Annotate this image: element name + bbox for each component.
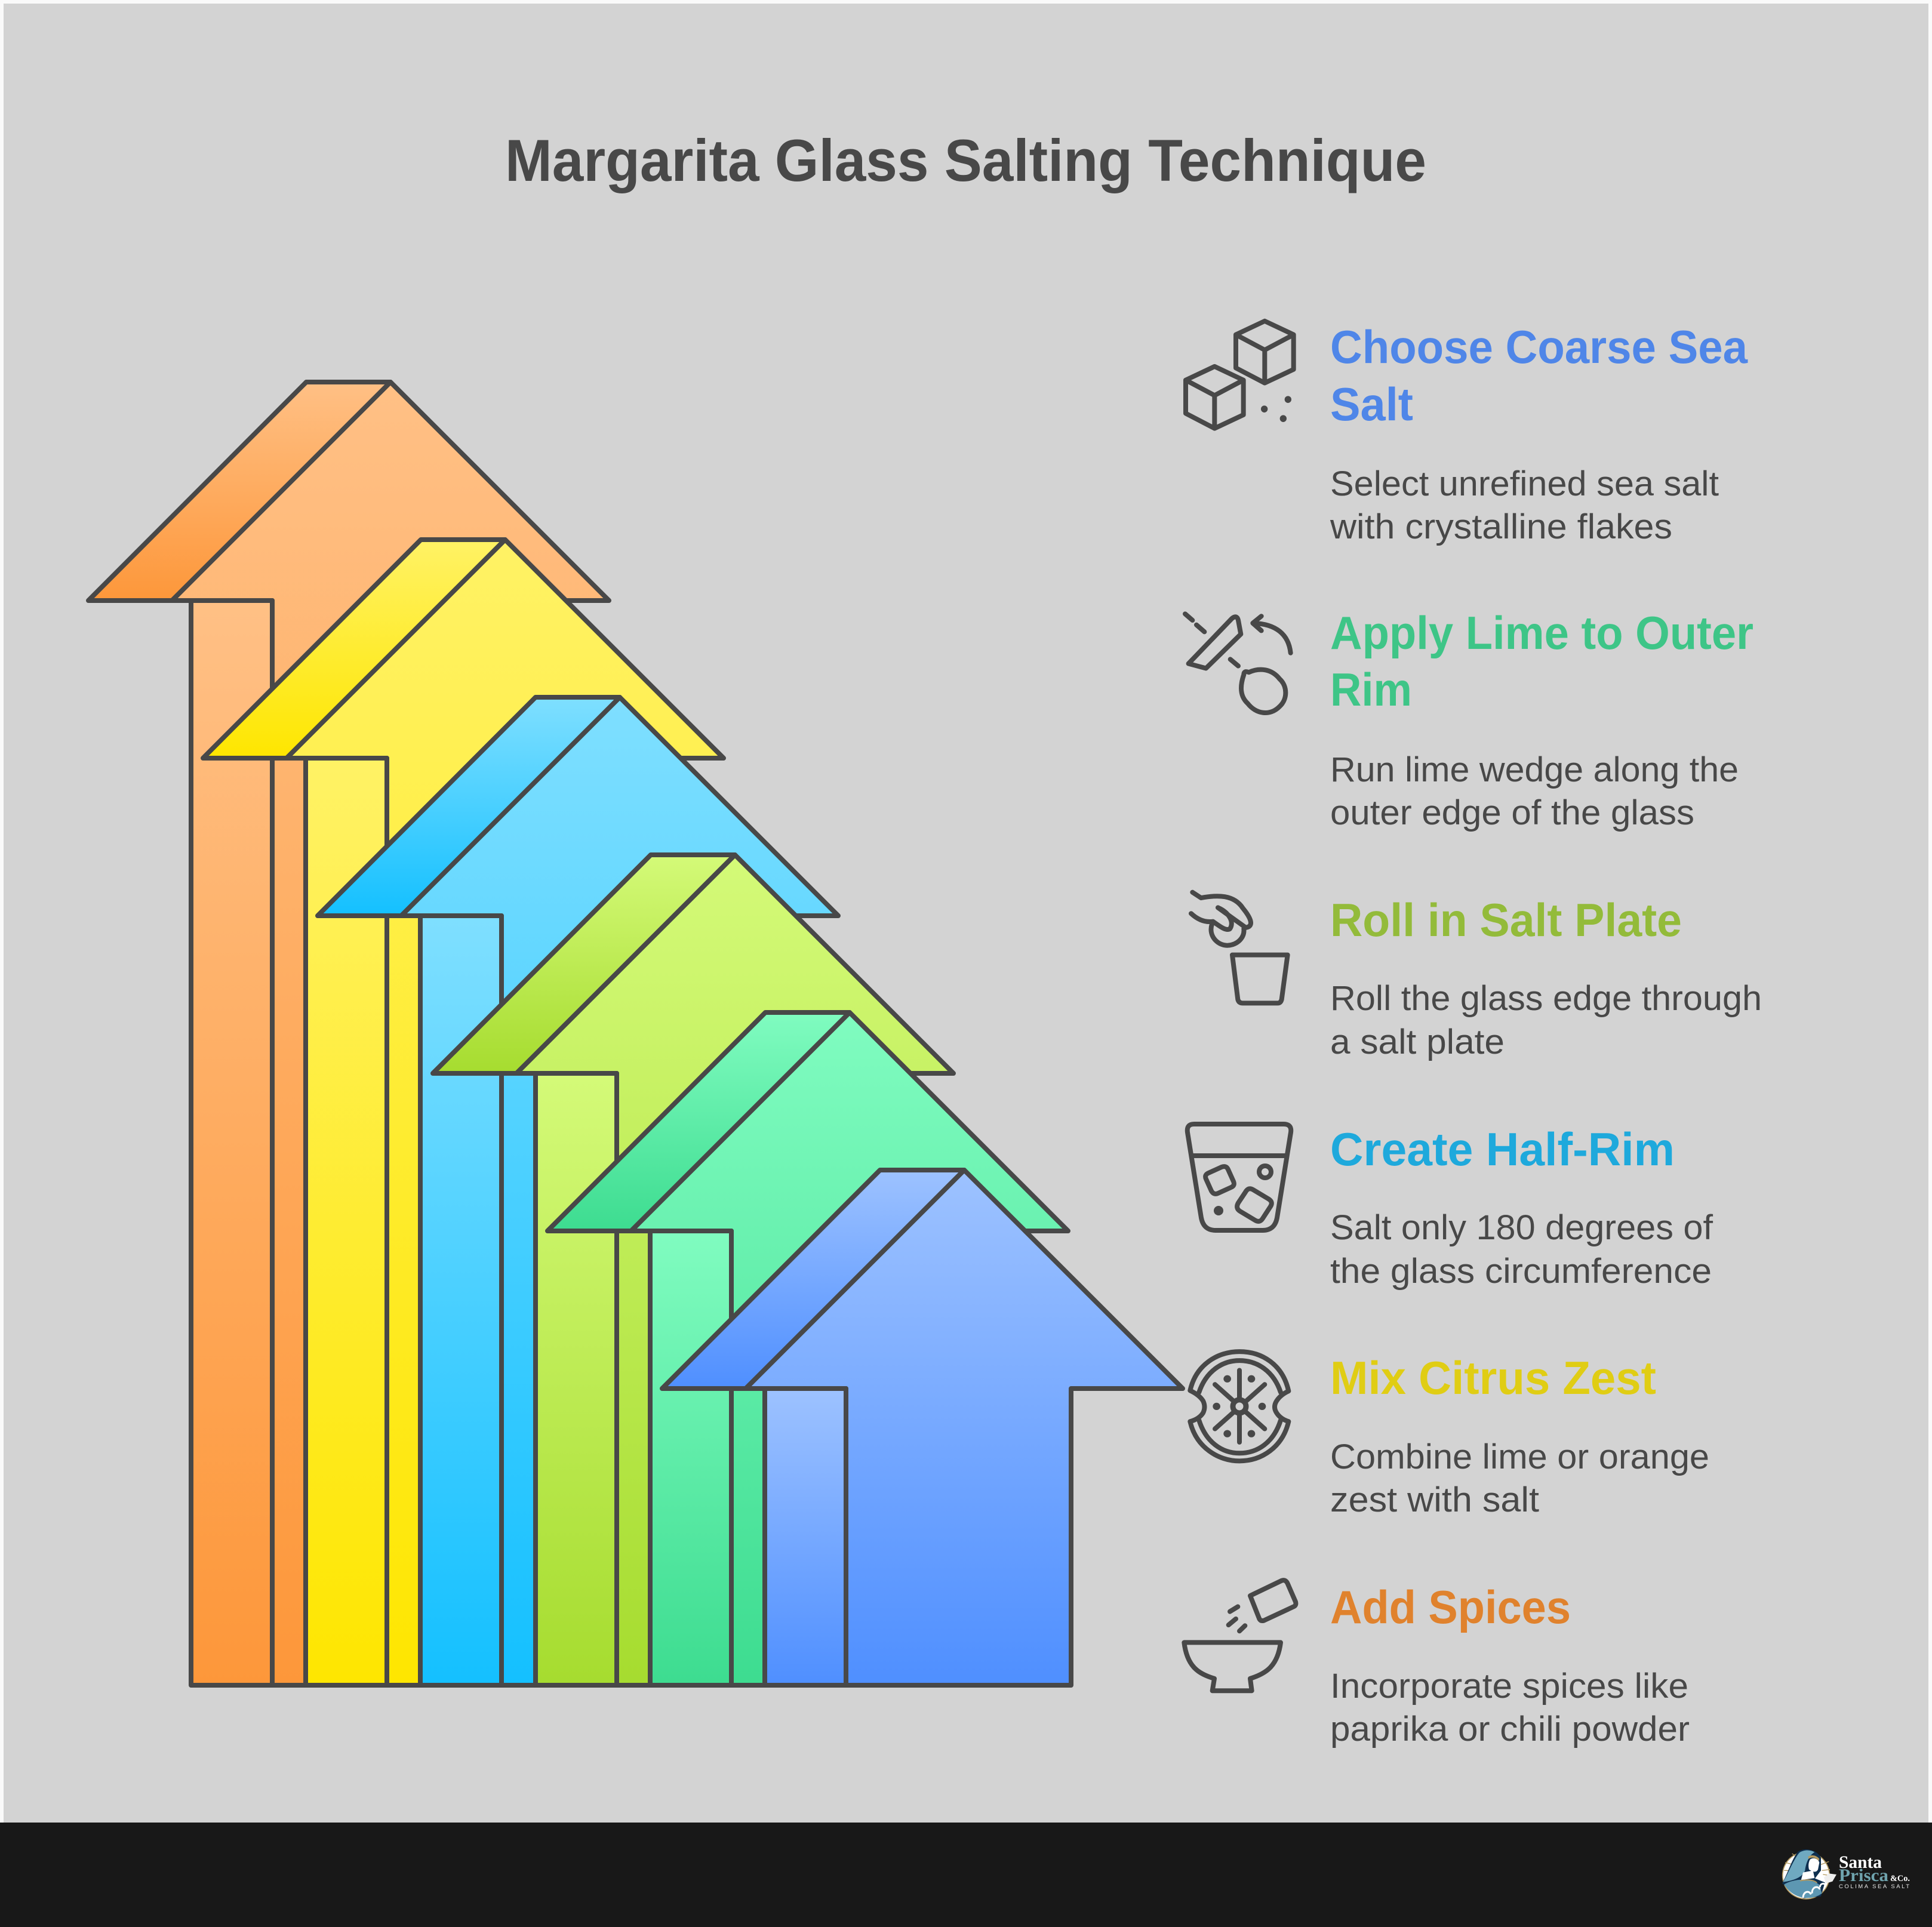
step 4 text: Salt only 180 degrees of (1330, 1208, 1713, 1247)
icon: citrus slice (1190, 1352, 1288, 1461)
step 2 text: Rim (1330, 663, 1412, 716)
step 1 text (1330, 321, 1748, 546)
arrow chart: six stacked arrows (88, 382, 1183, 1685)
logo wordmark (1839, 1852, 1910, 1890)
step 4 text: Create Half-Rim (1330, 1123, 1675, 1175)
logo wordmark: COLIMA SEA SALT (1839, 1883, 1909, 1890)
step 6 text: Add Spices (1330, 1581, 1571, 1633)
step 2 text: Run lime wedge along the (1330, 750, 1739, 789)
icon: spices into bowl (1184, 1580, 1296, 1691)
step 1 text: Select unrefined sea salt (1330, 464, 1719, 503)
logo wordmark: &Co. (1890, 1874, 1910, 1883)
icon: half-rimmed glass with ice (1187, 1124, 1291, 1230)
icon: hand rolling glass (1191, 892, 1288, 1003)
step 1 text: Salt (1330, 378, 1413, 430)
step 2 text (1330, 607, 1753, 832)
step 3 text: a salt plate (1330, 1023, 1505, 1061)
logo wordmark: Santa (1839, 1852, 1882, 1872)
arrow 4: lime (433, 855, 953, 1685)
arrow 1: orange (88, 382, 609, 1685)
title: Margarita Glass Salting Technique (505, 127, 1426, 193)
step 6 text: Incorporate spices like (1330, 1667, 1688, 1706)
step 2 text: outer edge of the glass (1330, 793, 1694, 832)
step 4 text: the glass circumference (1330, 1252, 1712, 1291)
logo emblem (1782, 1849, 1836, 1899)
step 1 text: Choose Coarse Sea (1330, 321, 1748, 373)
footer logo (1782, 1849, 1910, 1899)
step 3 text: Roll in Salt Plate (1330, 894, 1682, 946)
step 3 text (1330, 894, 1762, 1061)
step 6 text: paprika or chili powder (1330, 1710, 1690, 1749)
arrow 2: yellow (203, 540, 724, 1685)
logo wordmark: Prisca (1839, 1866, 1888, 1885)
footer bar (0, 1823, 1932, 1927)
step 5 text: Combine lime or orange (1330, 1437, 1709, 1476)
step 1 text: with crystalline flakes (1330, 507, 1672, 546)
step 5 text (1330, 1352, 1709, 1519)
icon: salt cubes (1186, 321, 1294, 429)
step 3 text: Roll the glass edge through (1330, 979, 1762, 1018)
step 6 text (1330, 1581, 1690, 1749)
arrow 3: sky blue (318, 697, 838, 1685)
step 4 text (1330, 1123, 1713, 1291)
step 5 text: zest with salt (1330, 1480, 1539, 1519)
arrow 6: blue (662, 1170, 1183, 1685)
step 2 text: Apply Lime to Outer (1330, 607, 1753, 659)
arrow 5: green (547, 1012, 1068, 1685)
step 5 text: Mix Citrus Zest (1330, 1352, 1656, 1404)
icon: lime wedge on rim (1185, 614, 1291, 713)
